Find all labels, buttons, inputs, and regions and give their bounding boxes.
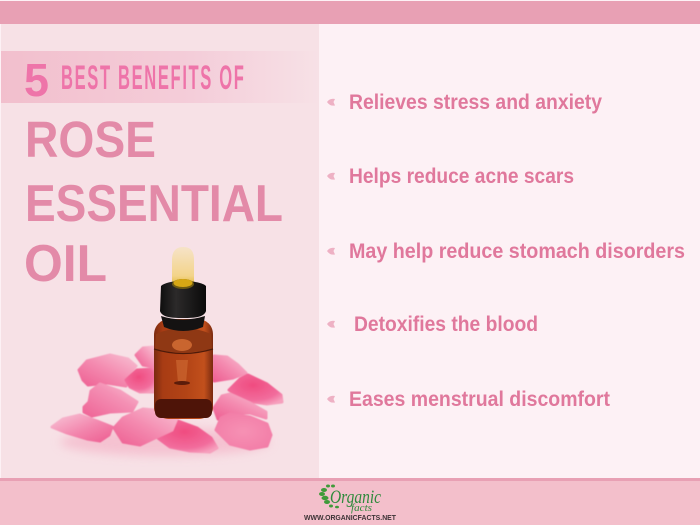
logo wordmark: Organic xyxy=(330,487,381,508)
illustration: rose petals and bottle xyxy=(52,247,282,456)
title: rose essential oil: ESSENTIAL xyxy=(25,175,283,233)
heading: 5 best benefits of xyxy=(24,54,244,106)
logo leaves xyxy=(319,484,339,508)
title: rose essential oil: OIL xyxy=(24,235,107,293)
title: rose essential oil: ROSE xyxy=(25,111,156,168)
heading band xyxy=(1,51,319,103)
top banner xyxy=(0,1,700,24)
benefit 3: May help reduce stomach disorders xyxy=(349,240,685,263)
rose petals xyxy=(52,347,282,452)
logo: organic facts xyxy=(319,484,381,514)
benefit 4: Detoxifies the blood xyxy=(354,313,538,336)
heading: 5 best benefits of: 5 xyxy=(24,54,49,106)
logo: organic facts: facts xyxy=(351,503,372,514)
heading: 5 best benefits of: BEST BENEFITS OF xyxy=(61,58,244,97)
footer bar xyxy=(0,478,700,525)
left panel xyxy=(1,24,319,478)
dropper bulb xyxy=(172,247,194,288)
bottle glass xyxy=(154,319,213,419)
soft petal shadow xyxy=(60,428,270,456)
bottle xyxy=(154,247,213,419)
website url: WWW.ORGANICFACTS.NET xyxy=(304,513,396,522)
benefit 1: Relieves stress and anxiety xyxy=(349,91,602,114)
benefit 5: Eases menstrual discomfort xyxy=(349,388,610,411)
benefit 2: Helps reduce acne scars xyxy=(349,165,574,188)
title: rose essential oil xyxy=(24,111,283,293)
list of benefits xyxy=(327,91,685,411)
dropper cap xyxy=(160,281,206,318)
